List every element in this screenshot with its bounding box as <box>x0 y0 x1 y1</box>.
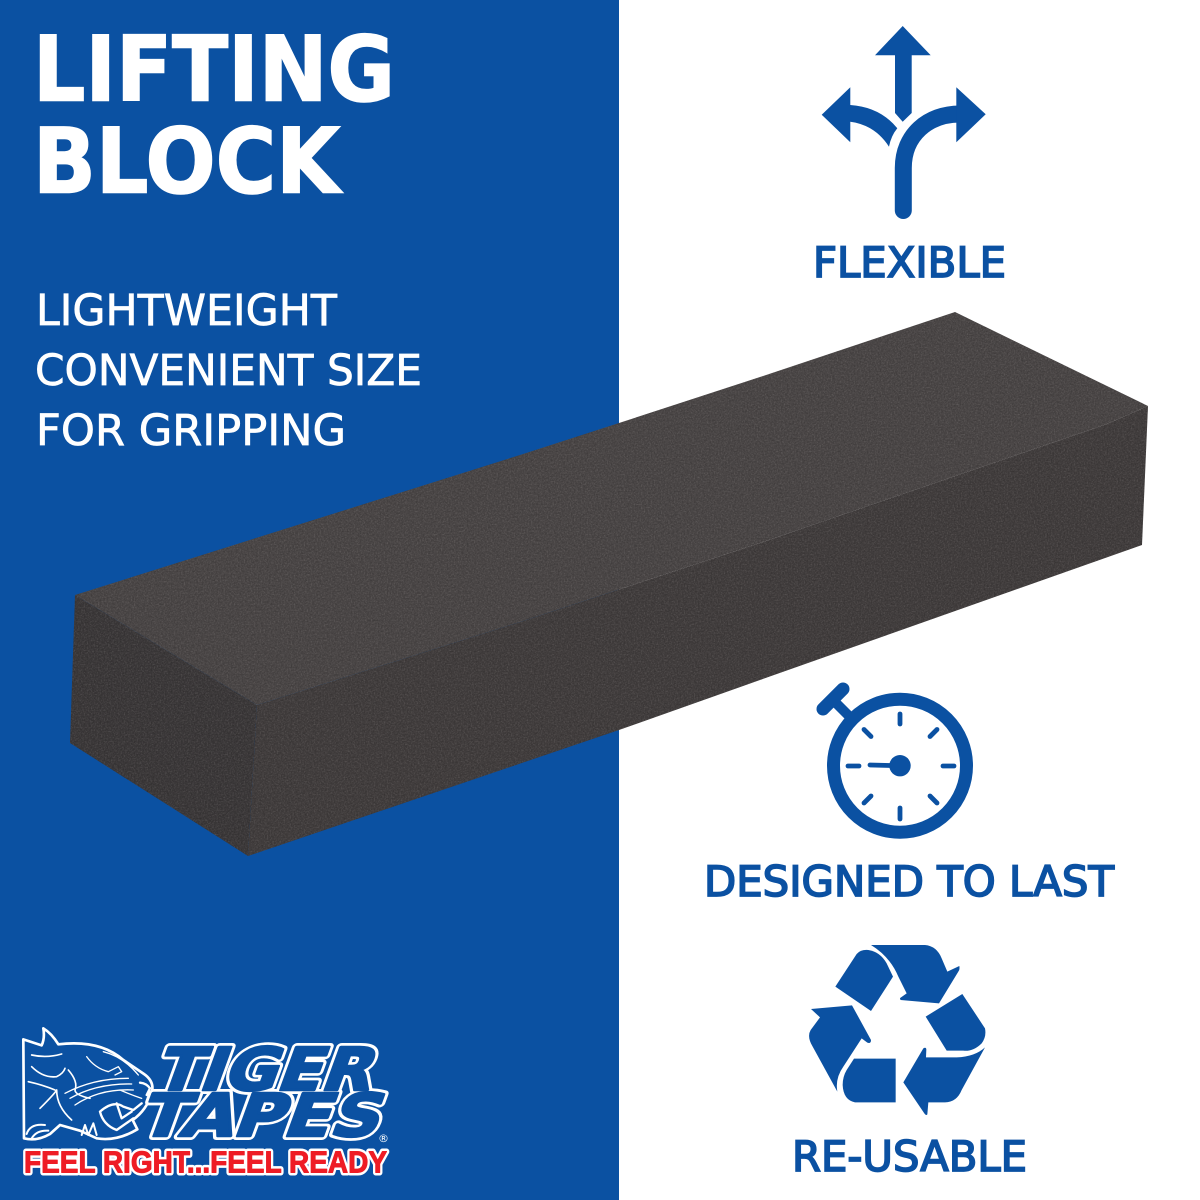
label: designed to last: DESIGNED TO LAST <box>704 857 1114 906</box>
logo mark: registered: ® <box>378 1132 389 1145</box>
title <box>33 18 395 214</box>
text block: product features: CONVENIENT SIZE <box>35 346 422 396</box>
logo icon: tiger head <box>23 1028 152 1139</box>
label: re-usable: RE-USABLE <box>792 1132 1027 1181</box>
icon: three-way arrows <box>822 26 986 210</box>
logo tagline outline: FEEL RIGHT...FEEL READY <box>24 1144 387 1180</box>
logo tagline: FEEL RIGHT...FEEL READY <box>24 1144 387 1180</box>
icon: stopwatch <box>823 689 966 832</box>
text block: product features <box>35 286 422 456</box>
logo text: brand name fill: TIGER <box>148 1036 389 1105</box>
logo text: brand name outline: TAPES <box>132 1082 397 1151</box>
label: flexible: FLEXIBLE <box>813 238 1006 287</box>
logo text: brand name fill: TAPES <box>132 1082 397 1151</box>
logo text: brand name fill <box>132 1036 397 1151</box>
icon: recycling symbol <box>809 945 985 1115</box>
product photo: foam block <box>70 312 1148 856</box>
title: LIFTING <box>33 18 395 122</box>
logo: Tiger Tapes <box>23 1028 397 1180</box>
title: BLOCK <box>33 110 343 214</box>
panel: blue background <box>0 0 619 1200</box>
logo text: brand name outline: TIGER <box>148 1036 389 1105</box>
text block: product features: LIGHTWEIGHT <box>36 286 338 336</box>
logo text: brand name outline <box>132 1036 397 1151</box>
text block: product features: FOR GRIPPING <box>36 406 346 456</box>
